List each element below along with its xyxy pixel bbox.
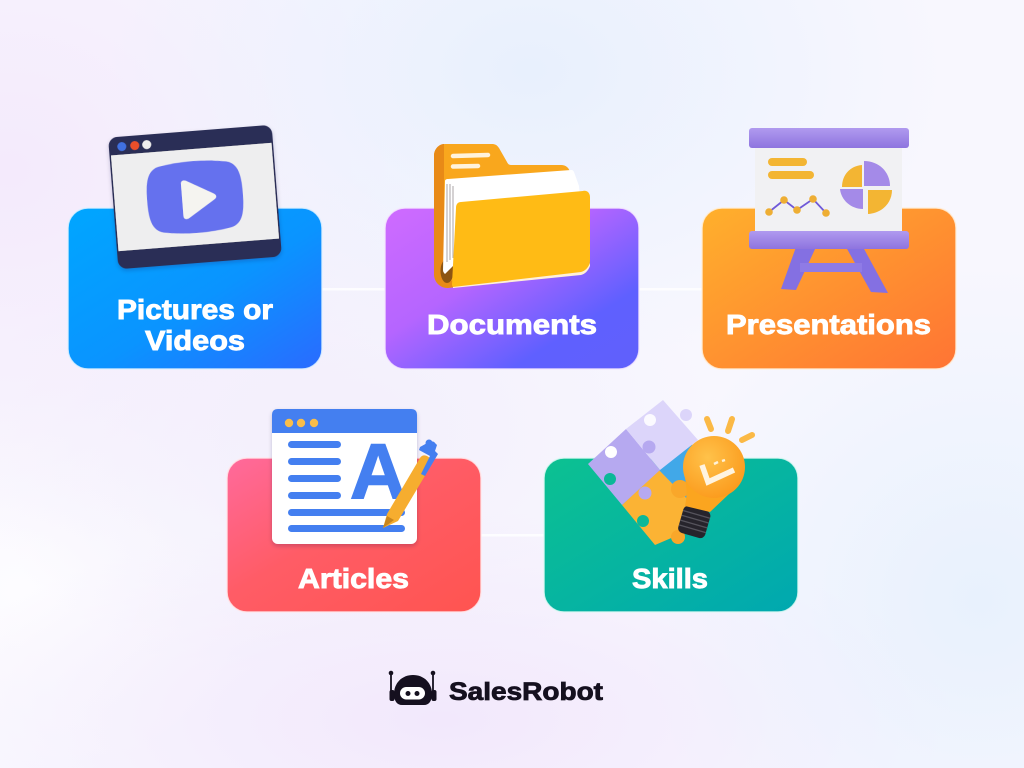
label: Articles bbox=[298, 563, 409, 594]
label: Documents bbox=[427, 309, 597, 340]
label: Presentations bbox=[726, 309, 931, 340]
card background bbox=[544, 458, 798, 612]
card background bbox=[385, 208, 639, 369]
icon: robot head bbox=[389, 671, 436, 705]
label bbox=[117, 294, 273, 356]
label: Pictures or bbox=[117, 294, 273, 325]
label: Videos bbox=[145, 325, 245, 356]
brand logo bbox=[389, 671, 604, 706]
panel: Documents bbox=[385, 144, 639, 369]
icon: presentation board bbox=[749, 128, 909, 293]
connector: cards 1 to 2 bbox=[320, 288, 388, 290]
card background bbox=[68, 208, 322, 369]
panel: Pictures or Videos bbox=[68, 125, 322, 369]
connector: cards 2 to 3 bbox=[637, 288, 705, 290]
icon: puzzle and light bulb bbox=[588, 400, 752, 545]
icon: folder bbox=[434, 144, 590, 288]
icon: article page with pen bbox=[272, 409, 438, 544]
panel: Articles bbox=[227, 409, 481, 612]
panel: Presentations bbox=[702, 128, 956, 369]
card background bbox=[702, 208, 956, 369]
panel: Skills bbox=[544, 400, 798, 612]
card background bbox=[227, 458, 481, 612]
icon: video player window bbox=[108, 125, 282, 269]
wordmark: SalesRobot bbox=[449, 678, 604, 706]
label: Skills bbox=[632, 563, 708, 594]
icon: article page with pen: A bbox=[350, 427, 406, 515]
connector: cards 4 to 5 bbox=[479, 534, 547, 536]
